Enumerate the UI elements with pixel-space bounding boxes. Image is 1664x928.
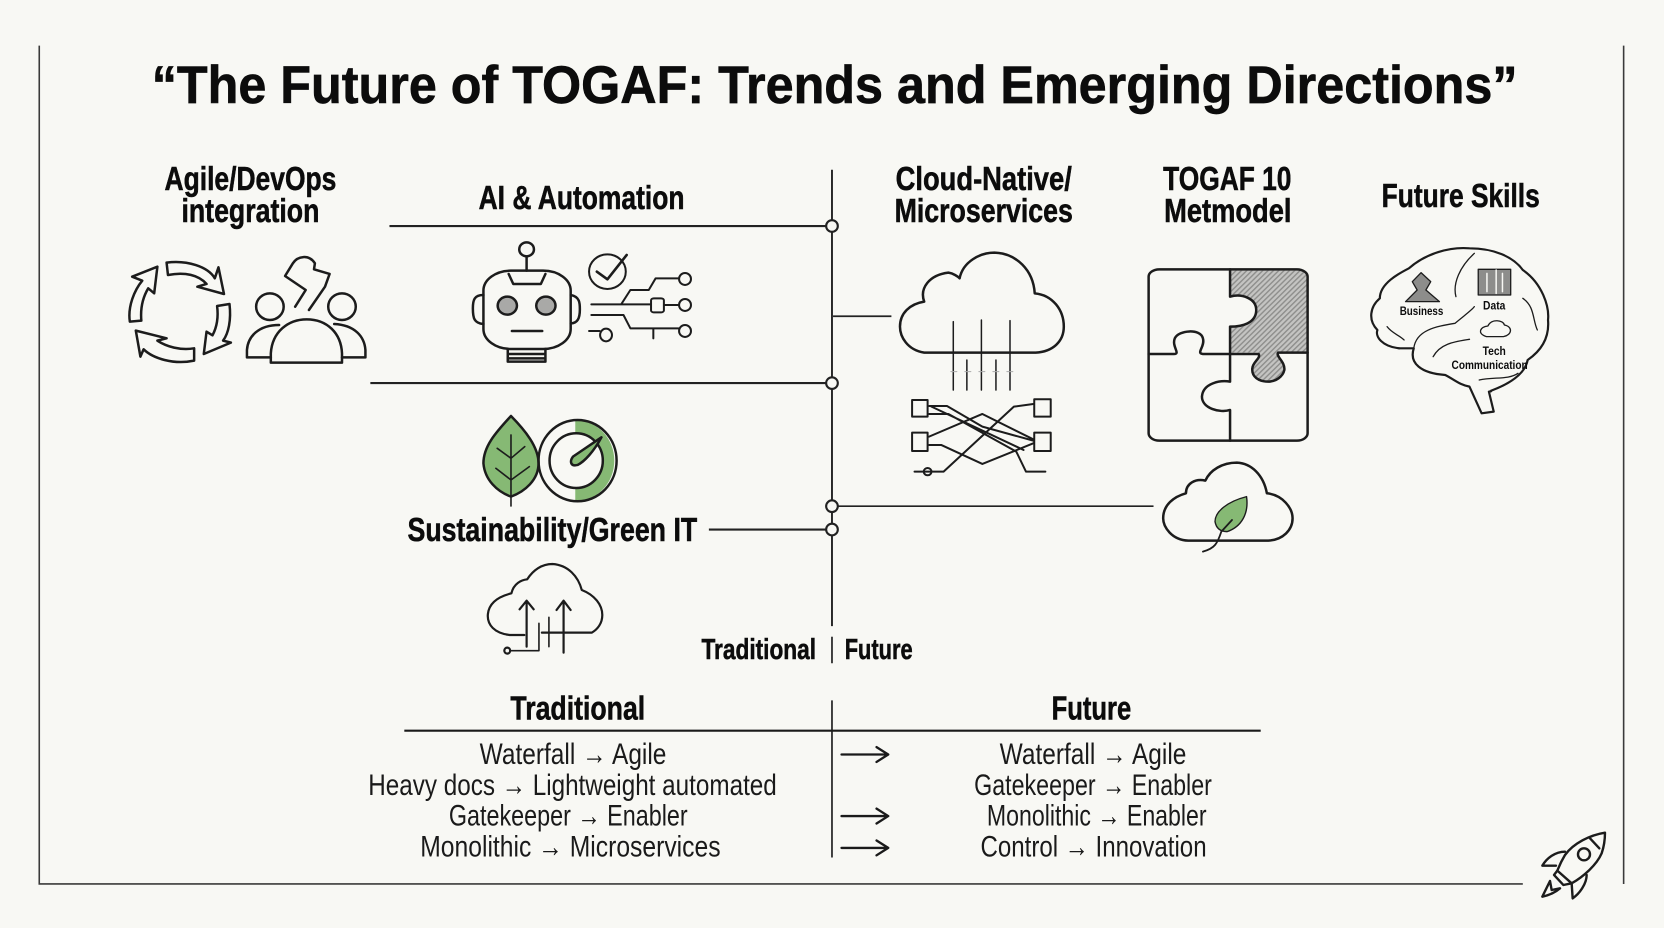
comparison table: Waterfall → Agile (480, 738, 666, 771)
heading: Future Skills: Future Skills (1382, 177, 1540, 214)
comparison table: Future (1052, 689, 1131, 726)
brain labels: Tech (1483, 345, 1506, 358)
icon: cloud with circuit arrows (488, 564, 602, 654)
brain labels (1400, 299, 1528, 372)
heading: Cloud-Native/Microservices: Microservices (895, 192, 1073, 229)
heading: Cloud-Native/Microservices: Cloud-Native/ (896, 160, 1072, 197)
comparison table: Monolithic → Microservices (420, 830, 721, 863)
timeline spine and connectors (370, 170, 1154, 626)
heading: Agile/DevOps integration (164, 160, 336, 229)
icon: cloud microservices (900, 253, 1064, 390)
icon: robot (473, 242, 580, 362)
icon: microservices network (912, 399, 1051, 475)
title: “The Future of TOGAF: Trends and Emerging Directions” (152, 56, 1518, 115)
brain labels: Business (1400, 305, 1443, 318)
small divider label: Traditional | Future: Future (845, 634, 913, 666)
icon: agile cycle arrows (129, 262, 231, 362)
brain labels: Communication (1452, 359, 1528, 372)
comparison table (368, 689, 1261, 863)
heading: TOGAF 10 Metmodel (1163, 160, 1291, 229)
comparison table: Gatekeeper → Enabler (449, 800, 688, 833)
icon: rocket (1542, 833, 1605, 898)
icon: green cloud with leaf (1163, 463, 1293, 552)
icon: team with lightning bolt (247, 257, 365, 363)
comparison table: Control → Innovation (981, 830, 1207, 863)
comparison table: Heavy docs → Lightweight automated (368, 769, 777, 802)
comparison table: Monolithic → Enabler (987, 800, 1207, 833)
heading: AI & Automation: AI & Automation (479, 179, 684, 216)
heading: Sustainability/Green IT: Sustainability/Green IT (408, 511, 697, 548)
brain labels: Data (1483, 299, 1506, 313)
heading: Agile/DevOps integration: Agile/DevOps (164, 160, 336, 197)
icon: green leaf (483, 416, 539, 506)
heading: Cloud-Native/Microservices (895, 160, 1073, 229)
heading: TOGAF 10 Metmodel: Metmodel (1164, 192, 1291, 229)
small divider label: Traditional | Future: Traditional (701, 634, 816, 666)
icon: puzzle metamodel (1149, 269, 1308, 441)
comparison table: Traditional (510, 689, 645, 726)
icon: green gauge (539, 420, 617, 501)
icon: automation check and circuit (589, 254, 691, 341)
small divider label: Traditional | Future (701, 634, 913, 666)
heading: TOGAF 10 Metmodel: TOGAF 10 (1163, 160, 1291, 197)
heading: Agile/DevOps integration: integration (181, 192, 319, 229)
comparison table: Gatekeeper → Enabler (974, 769, 1212, 802)
icon: brain with future skills (1371, 248, 1548, 413)
comparison table: Waterfall → Agile (1000, 738, 1186, 771)
